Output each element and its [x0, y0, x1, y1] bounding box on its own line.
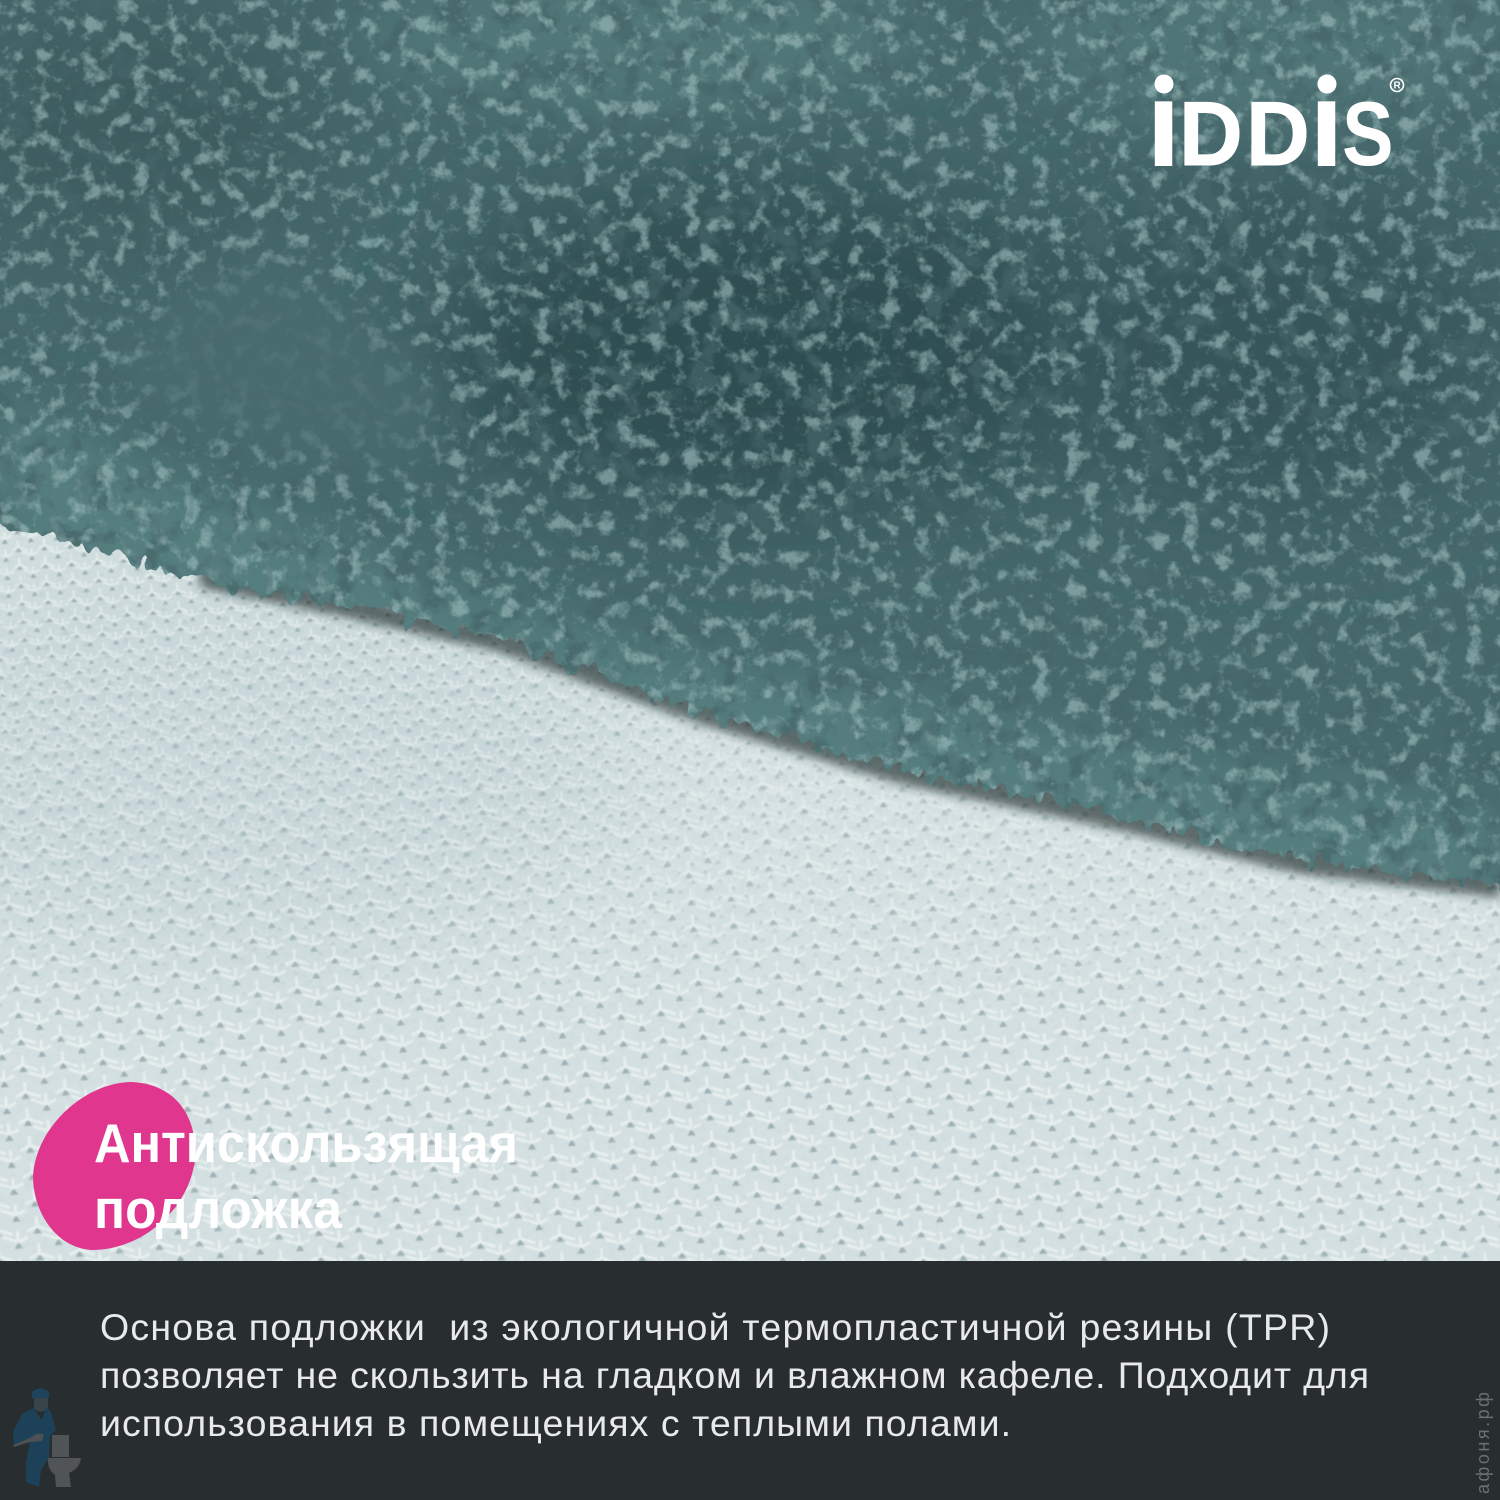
logo: IDDIS: D — [1179, 83, 1243, 184]
text block: description: использования в помещениях с теплыми полами. — [100, 1402, 1011, 1444]
icon: pink blob — [33, 1082, 195, 1250]
logo: IDDIS: D — [1246, 83, 1310, 184]
panel: teal shaggy rug photo — [0, 0, 1500, 920]
logo: IDDIS — [1149, 74, 1404, 184]
watermark: site name: афоня.рф — [1473, 1392, 1493, 1494]
heading: anti-slip backing: подложка — [94, 1178, 342, 1240]
text block: description: позволяет не скользить на гладком и влажном кафеле. Подходит для — [100, 1354, 1369, 1396]
logo: IDDIS: R — [1394, 80, 1402, 92]
heading: anti-slip backing: Антискользящая — [94, 1112, 518, 1174]
panel: white anti-slip backing photo — [0, 500, 1500, 1270]
text block: description: Основа подложки из экологичной термопластичной резины (TPR) — [100, 1306, 1330, 1348]
panel: dark caption band — [0, 1261, 1500, 1500]
logo letter I: I — [1149, 82, 1178, 184]
icon: plumber watermark — [13, 1388, 81, 1487]
logo: IDDIS: I — [1312, 82, 1341, 184]
text block: description — [100, 1306, 1369, 1444]
heading: anti-slip backing — [94, 1112, 518, 1240]
logo: IDDIS: S — [1342, 83, 1394, 184]
panel: shadow under the rug edge — [200, 560, 1500, 898]
